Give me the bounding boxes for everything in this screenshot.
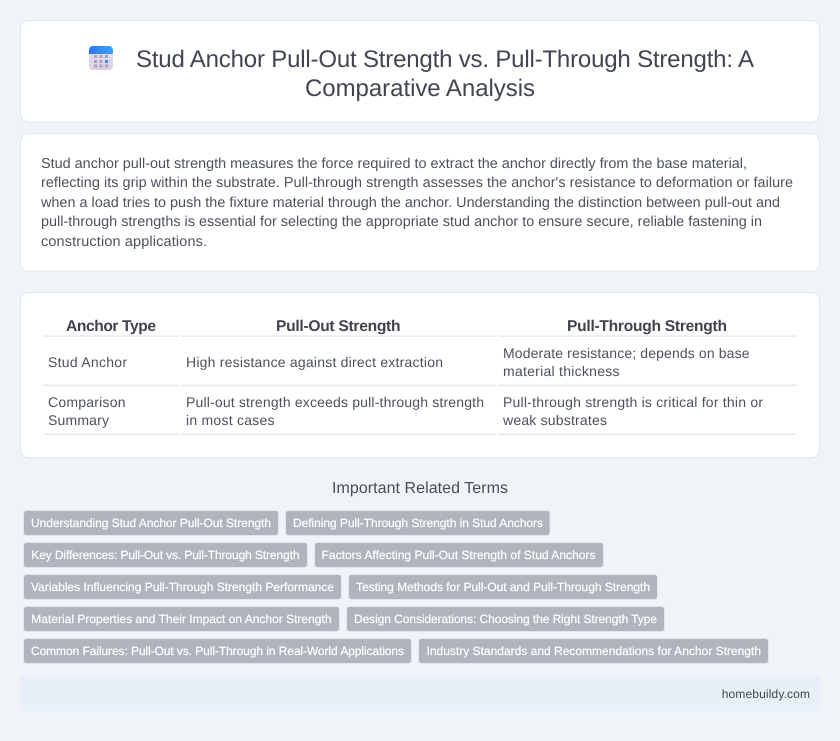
title: Stud Anchor Pull-Out Strength vs. Pull-Through Strength: A [136,46,754,73]
table header row: Pull-Out Strength [276,318,400,335]
text block: definition of pull-out and pull-through strength: when a load tries to push the fixture material through the anchor. Understanding the distinction between pull-out and [40,195,780,211]
footer [20,677,820,711]
tag [24,510,278,536]
tag [314,542,604,568]
tag: Industry Standards and Recommendations for Anchor Strength [426,644,761,658]
tag [24,574,342,600]
text block: definition of pull-out and pull-through strength: reflecting its grip within the substrate. Pull-through strength assesses the anchor's resistance to deformation or failure [41,175,793,191]
tag: Defining Pull-Through Strength in Stud Anchors [293,516,543,530]
table header row: Pull-Through Strength [567,318,727,335]
tag: Factors Affecting Pull-Out Strength of Stud Anchors [322,548,596,562]
tag [24,542,308,568]
tag: Design Considerations: Choosing the Right Strength Type [354,612,657,626]
table row: comparison summary [43,394,797,435]
table row: stud anchor [43,345,797,386]
panel: related term tags [24,510,768,664]
tag [24,638,412,664]
footer: homebuildy.com [722,687,810,701]
title: Comparative Analysis [305,75,535,102]
table row: comparison summary: Pull-out strength exceeds pull-through strength [186,394,484,410]
table row: comparison summary: weak substrates [502,412,607,428]
table row: stud anchor: Stud Anchor [48,354,127,370]
tag: Testing Methods for Pull-Out and Pull-Through Strength [356,580,650,594]
tag [24,606,340,632]
table row: comparison summary: Pull-through strength is critical for thin or [503,394,763,410]
table header row [43,318,797,337]
text block: definition of pull-out and pull-through strength: pull-through strengths is essential for selecting the appropriate stud anchor to ensure secure, reliable fastening in [41,214,762,230]
table row: comparison summary: Comparison [48,394,126,410]
tag [348,574,658,600]
heading: important related terms: Important Related Terms [332,480,508,497]
table row: stud anchor: High resistance against direct extraction [186,354,443,370]
text block: definition of pull-out and pull-through strength: Stud anchor pull-out strength measures the force required to extract the anchor directly from the base material, [41,156,747,172]
table row: comparison summary: in most cases [186,412,274,428]
tag [286,510,550,536]
table row: comparison summary: Summary [48,412,109,428]
tag: Variables Influencing Pull-Through Strength Performance [31,580,334,594]
tag: Understanding Stud Anchor Pull-Out Strength [31,516,271,530]
panel: title header [20,20,820,122]
tag [346,606,664,632]
panel: comparison table [20,292,820,458]
table header row: Anchor Type [66,318,156,335]
panel: intro paragraph [20,134,820,271]
tag: Common Failures: Pull-Out vs. Pull-Through in Real-World Applications [31,644,404,658]
table row: stud anchor: material thickness [503,363,620,379]
icon: calendar [89,46,113,70]
text block: definition of pull-out and pull-through strength [40,156,793,250]
title [136,46,754,102]
table row: stud anchor: Moderate resistance; depends on base [503,345,750,361]
tag [418,638,768,664]
tag: Key Differences: Pull-Out vs. Pull-Through Strength [31,548,300,562]
tag: Material Properties and Their Impact on Anchor Strength [31,612,332,626]
text block: definition of pull-out and pull-through strength: construction applications. [41,234,207,250]
